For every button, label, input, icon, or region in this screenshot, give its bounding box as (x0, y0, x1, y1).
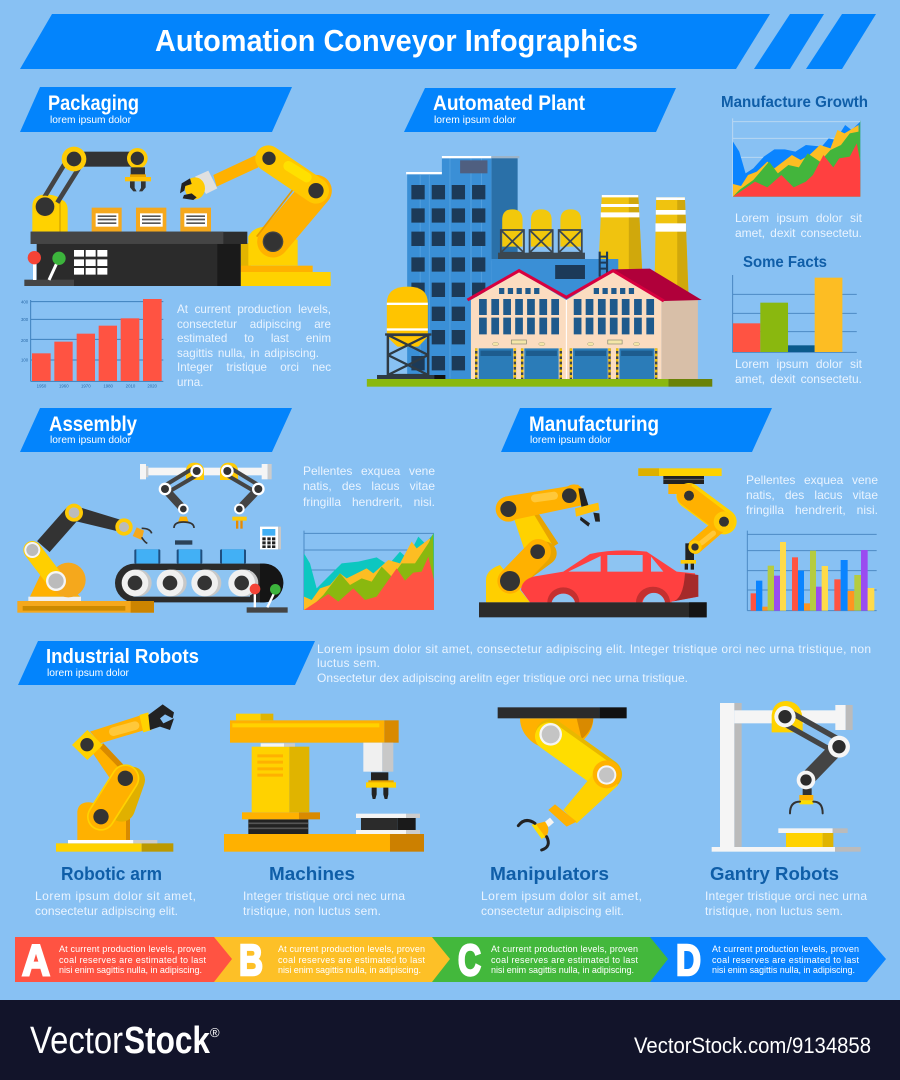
text block: industrial robots intro (317, 642, 871, 685)
step C (458, 936, 638, 985)
text: manipulators (481, 889, 642, 918)
text: machines: tristique, non luctus sem. (243, 904, 381, 918)
caption: machines: Machines (269, 864, 355, 884)
step B: B (239, 936, 263, 985)
bar chart: production: 2020 (147, 384, 158, 389)
robot: machines (224, 714, 424, 918)
heading: some facts: Some Facts (743, 254, 827, 271)
heading: packaging: Packaging (48, 92, 139, 115)
text: robotic arm: consectetur adipiscing elit. (35, 904, 178, 918)
robot: gantry robots (705, 701, 867, 918)
bar chart: manufacturing (747, 531, 877, 611)
step B: coal reserves are estimated to last (278, 955, 425, 965)
bar chart: production: 100 (21, 358, 29, 363)
bar chart: production: 200 (21, 338, 29, 343)
bar chart: some facts (732, 275, 857, 352)
heading: manufacturing: lorem ipsum dolor (530, 435, 612, 446)
step A: At current production levels, proven (59, 944, 206, 954)
bar chart: production: 300 (21, 317, 29, 322)
text block: packaging: consectetur adipiscing are (177, 318, 331, 331)
step A: A (22, 936, 50, 985)
text block: assembly (303, 464, 435, 510)
footer watermark band: ® (210, 1025, 220, 1040)
area chart: manufacture growth (732, 118, 860, 197)
text block: industrial robots intro: luctus sem. (317, 656, 380, 670)
text: robotic arm: Lorem ipsum dolor sit amet, (35, 889, 196, 903)
text block: some facts note: amet, dexit consectetu. (735, 372, 862, 386)
step D: D (676, 936, 701, 985)
text: gantry robots (705, 889, 867, 918)
text block: manufacturing: Pellentes exquea vene (746, 473, 878, 487)
text block: some facts note (735, 357, 862, 389)
heading: manufacturing (501, 408, 772, 452)
text block: manufacturing (746, 473, 878, 519)
panel: assembly (17, 408, 435, 613)
text block: packaging: At current production levels, (177, 303, 331, 316)
step D: nisi enim sagittis nulla, in adipiscing. (712, 965, 855, 975)
heading: assembly: lorem ipsum dolor (50, 435, 132, 446)
bar chart: production: 2010 (126, 384, 136, 389)
text block: packaging: urna. (177, 376, 203, 389)
step A: nisi enim sagittis nulla, in adipiscing. (59, 965, 202, 975)
footer watermark band: Stock (124, 1020, 211, 1062)
step B: At current production levels, proven (278, 944, 425, 954)
heading: industrial robots (18, 641, 315, 685)
text block: manufacture growth note: amet, dexit consectetu. (735, 226, 862, 240)
heading: automated plant (404, 88, 676, 132)
step C: At current production levels, proven (491, 944, 638, 954)
title banner (20, 14, 876, 69)
bar chart: production: 1980 (103, 384, 114, 389)
caption: manipulators: Manipulators (490, 864, 609, 884)
footer watermark band: Vector (30, 1020, 123, 1062)
step D: At current production levels, proven (712, 944, 859, 954)
icon: robotic arm (56, 704, 174, 852)
heading: manufacture growth: Manufacture Growth (721, 94, 868, 111)
text block: assembly: fringilla hendrerit, nisi. (303, 495, 435, 509)
text block: manufacturing: fringilla hendrerit, nisi. (746, 503, 878, 517)
panel: automated plant (367, 88, 868, 389)
caption: gantry robots: Gantry Robots (710, 864, 839, 884)
heading: assembly: Assembly (49, 413, 137, 436)
text: manipulators: consectetur adipiscing elit. (481, 904, 624, 918)
text block: some facts note: Lorem ipsum dolor sit (735, 357, 862, 371)
heading: industrial robots: Industrial Robots (46, 646, 199, 668)
step C: nisi enim sagittis nulla, in adipiscing. (491, 965, 634, 975)
illustration: assembly conveyor (17, 463, 288, 613)
text block: manufacture growth note: Lorem ipsum dolor sit (735, 211, 862, 225)
text block: manufacturing: natis, des lacus vitae (746, 488, 878, 502)
step A (22, 936, 206, 985)
text block: assembly: natis, des lacus vitae (303, 479, 435, 493)
bar chart: production: 1970 (81, 384, 91, 389)
heading: automated plant: Automated Plant (433, 92, 585, 115)
step D: coal reserves are estimated to last (712, 955, 859, 965)
text: machines (243, 889, 405, 918)
heading: automated plant: lorem ipsum dolor (434, 115, 517, 126)
area chart: assembly (304, 531, 434, 610)
illustration: packaging line with robot arms (24, 147, 331, 286)
text block: packaging: estimated to last enim (177, 332, 331, 345)
caption: robotic arm: Robotic arm (61, 864, 162, 884)
heading: assembly (20, 408, 292, 452)
heading: manufacturing: Manufacturing (529, 413, 659, 436)
heading: industrial robots: lorem ipsum dolor (47, 668, 130, 679)
text block: packaging (177, 303, 331, 393)
step C: coal reserves are estimated to last (491, 955, 638, 965)
panel: industrial robots (18, 641, 871, 918)
bar chart: production: 1960 (59, 384, 69, 389)
step B: nisi enim sagittis nulla, in adipiscing. (278, 965, 421, 975)
text block: packaging: sagittis nulla, in adipiscing. (177, 347, 319, 360)
step B (239, 936, 425, 985)
text block: industrial robots intro: Lorem ipsum dolor sit amet, consectetur adipiscing elit. Integer tristique orci nec urna tristique, non (317, 642, 871, 656)
heading: packaging (20, 87, 292, 132)
robot: robotic arm (35, 704, 196, 918)
text: machines: Integer tristique orci nec urna (243, 889, 405, 903)
bar chart: production: 1950 (37, 384, 47, 389)
text block: assembly: Pellentes exquea vene (303, 464, 435, 478)
robot: manipulators (481, 707, 642, 918)
illustration: automated plant (367, 156, 712, 387)
panel: packaging (20, 87, 331, 393)
title banner: Automation Conveyor Infographics (155, 23, 638, 58)
illustration: car manufacturing robots (479, 468, 734, 617)
icon: gantry robot (712, 701, 861, 852)
text: gantry robots: Integer tristique orci nec urna (705, 889, 867, 903)
text: gantry robots: tristique, non luctus sem. (705, 904, 843, 918)
text block: industrial robots intro: Onsectetur dex adipiscing arelitn eger tristique orci nec urna tristique. (317, 671, 688, 685)
step D (676, 936, 859, 985)
bar chart: production (21, 299, 163, 389)
footer watermark band: VectorStock.com/9134858 (634, 1033, 871, 1058)
footer watermark band (0, 1000, 900, 1080)
step C: C (458, 936, 481, 985)
text: manipulators: Lorem ipsum dolor sit amet, (481, 889, 642, 903)
icon: machine (224, 714, 424, 852)
ribbon: A B C D steps (15, 936, 886, 985)
bar chart: production: 400 (21, 299, 29, 304)
icon: manipulator (498, 707, 627, 850)
text block: packaging: Integer tristique orci nec (177, 361, 331, 374)
text block: manufacture growth note (735, 211, 862, 243)
step A: coal reserves are estimated to last (59, 955, 206, 965)
panel: manufacturing (479, 408, 878, 617)
heading: packaging: lorem ipsum dolor (50, 115, 132, 126)
text: robotic arm (35, 889, 196, 918)
